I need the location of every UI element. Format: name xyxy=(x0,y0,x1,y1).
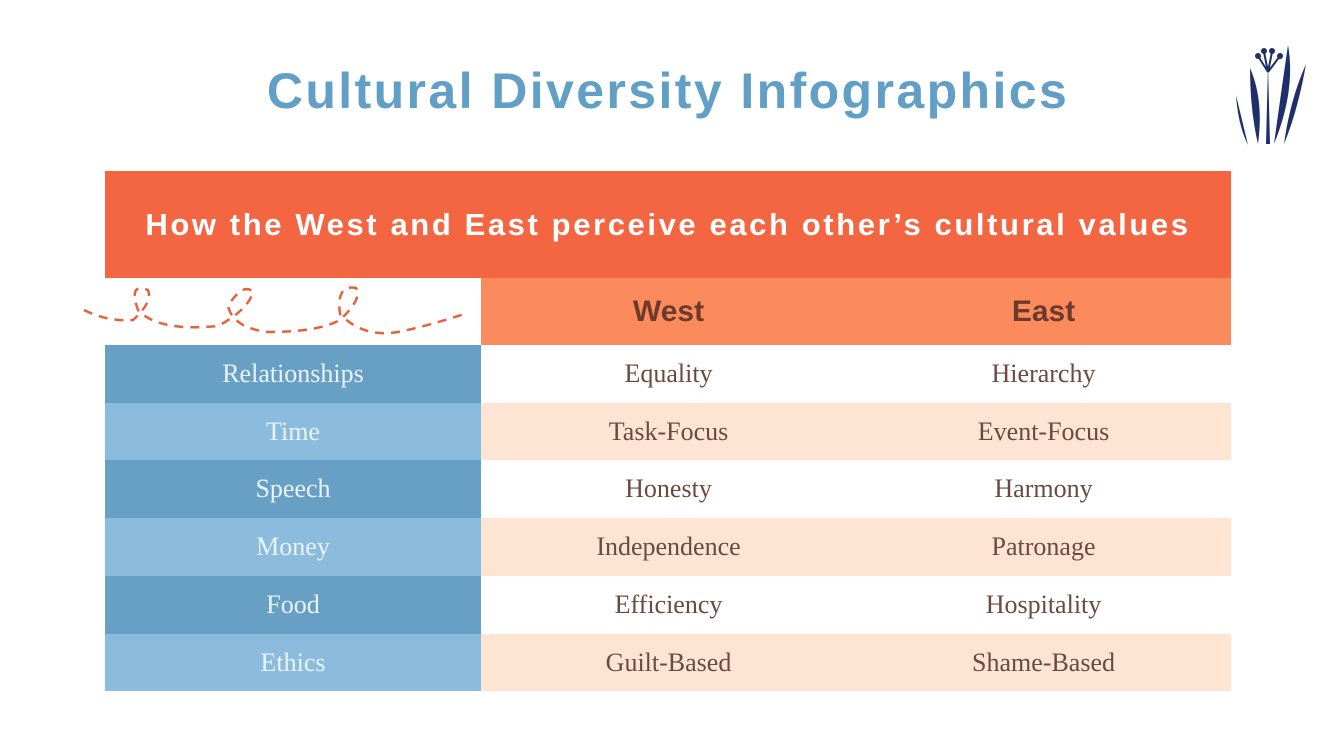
table rows: Equality xyxy=(624,359,713,388)
decorative dashed squiggle xyxy=(84,286,462,334)
table rows: Speech xyxy=(255,474,331,503)
column header: East xyxy=(856,278,1231,345)
table rows: Ethics xyxy=(260,648,326,676)
column header: West xyxy=(481,278,856,345)
table rows: Harmony xyxy=(994,474,1093,503)
table rows: Task-Focus xyxy=(609,416,728,446)
table rows: Relationships xyxy=(222,359,364,388)
table rows: Money xyxy=(256,532,330,561)
table rows: Honesty xyxy=(625,474,712,503)
table rows: Guilt-Based xyxy=(606,648,731,676)
column header: West: West xyxy=(633,294,704,328)
table rows: Event-Focus xyxy=(978,416,1109,446)
column header: East: East xyxy=(1012,294,1075,328)
table rows: Efficiency xyxy=(615,590,722,619)
table rows: Independence xyxy=(596,532,741,561)
table rows: Time xyxy=(266,416,320,446)
table rows: Hospitality xyxy=(986,590,1101,619)
title: Cultural Diversity Infographics xyxy=(267,63,1069,119)
icon: plant xyxy=(1236,45,1306,145)
table rows: Hierarchy xyxy=(992,359,1095,388)
table rows: Patronage xyxy=(992,532,1095,561)
table rows: Shame-Based xyxy=(972,648,1115,676)
table rows: Food xyxy=(266,590,320,619)
table rows xyxy=(105,345,1231,691)
header bar: How the West and East perceive each other’s cultural values xyxy=(145,206,1191,242)
header bar xyxy=(105,171,1231,278)
